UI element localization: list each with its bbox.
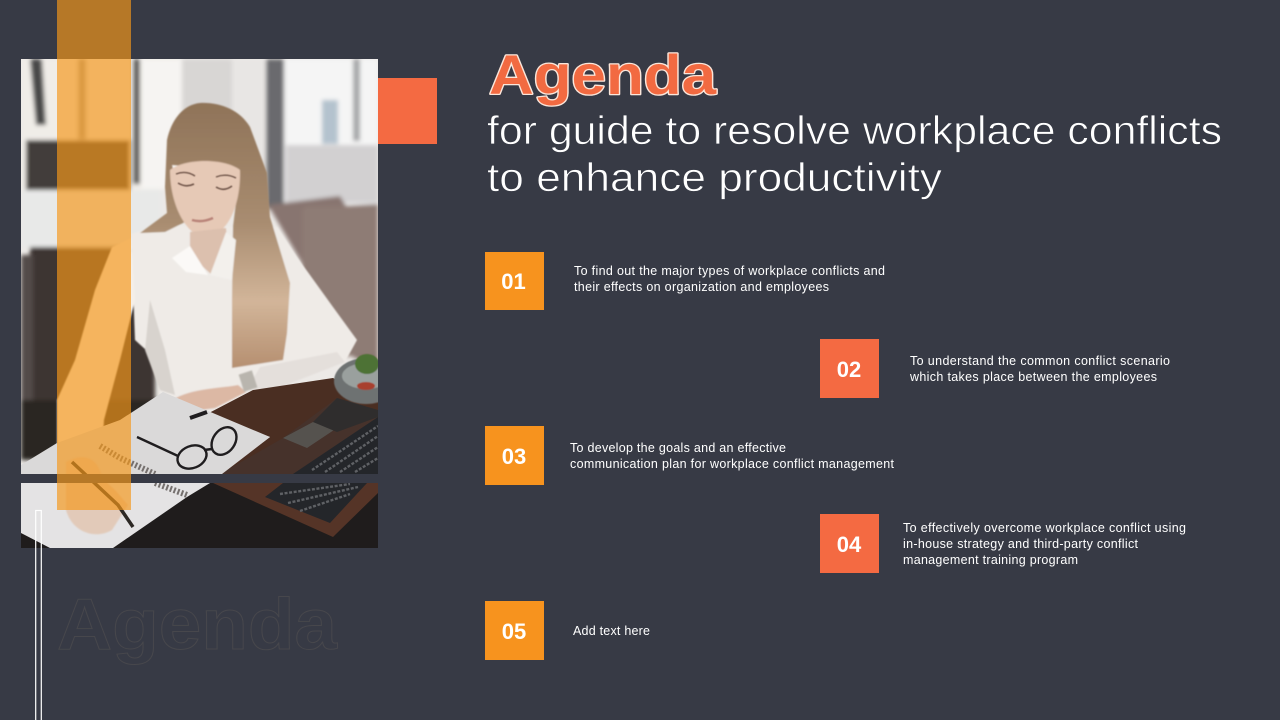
- number 03: 03: [502, 444, 526, 469]
- desk: [207, 378, 378, 474]
- photo: woman writing at a desk: [21, 59, 398, 548]
- translucent orange vertical bar: [57, 0, 131, 510]
- thin white vertical outline: [36, 510, 41, 720]
- badge 05: [485, 601, 544, 660]
- text 02: To understand the common conflict scenario: [910, 354, 1170, 368]
- glasses: [137, 412, 242, 473]
- text 05: Add text here: [573, 624, 650, 638]
- text 04: To effectively overcome workplace conflict using: [903, 521, 1186, 535]
- text 03: To develop the goals and an effective: [570, 441, 786, 455]
- badge 02: [820, 339, 879, 398]
- text 04: management training program: [903, 553, 1078, 567]
- agenda item 04: [820, 514, 1186, 573]
- dark horizontal band: [21, 474, 378, 483]
- agenda item 03: [485, 426, 895, 485]
- orange-red accent square: [378, 78, 437, 144]
- agenda item 01: [485, 252, 885, 310]
- subtitle line 1: for guide to resolve workplace conflicts: [487, 109, 1222, 153]
- face details: [176, 172, 236, 221]
- text 01: To find out the major types of workplace conflicts and: [574, 264, 885, 278]
- number 02: 02: [837, 357, 861, 382]
- badge 04: [820, 514, 879, 573]
- title: [487, 43, 1222, 200]
- agenda item 02: [820, 339, 1170, 398]
- text 02: which takes place between the employees: [909, 370, 1157, 384]
- number 01: 01: [501, 269, 526, 294]
- notebook: [21, 392, 270, 548]
- agenda item 05: [485, 601, 650, 660]
- heading: Agenda: Agenda: [489, 43, 717, 106]
- badge 01: [485, 252, 544, 310]
- text 04: in-house strategy and third-party conflict: [903, 537, 1139, 551]
- plate with salad: [334, 354, 378, 404]
- badge 03: [485, 426, 544, 485]
- woman's hair and body: [57, 103, 357, 470]
- number 05: 05: [502, 619, 526, 644]
- writing hand and pen: [66, 457, 133, 534]
- text 01: their effects on organization and employees: [574, 280, 829, 294]
- ghost outlined word Agenda: Agenda: [57, 585, 338, 665]
- open laptop: [220, 398, 378, 523]
- text 03: communication plan for workplace conflict management: [570, 457, 895, 471]
- number 04: 04: [837, 532, 862, 557]
- subtitle line 2: to enhance productivity: [487, 156, 942, 200]
